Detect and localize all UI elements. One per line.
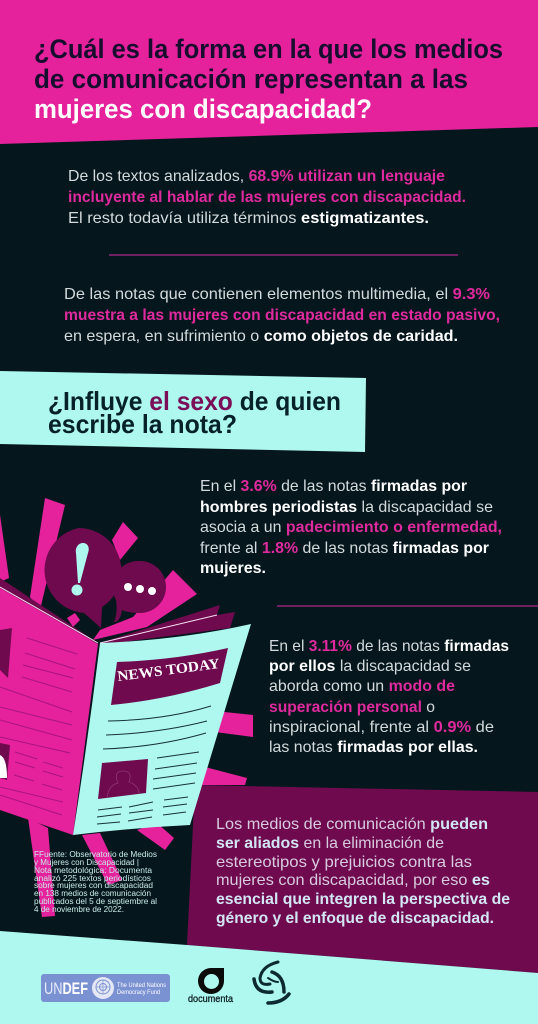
text block: superacion personal: las notas firmadas por ellas. [269,739,478,756]
rays behind the newspaper [0,498,253,917]
text block: padecimiento o enfermedad: hombres periodistas la discapacidad se [200,499,493,516]
text block: source note: FFuente: Observatorio de Medios [34,850,157,859]
title: ¿Cuál es la forma en la que los medios [34,34,503,64]
text block: lenguaje incluyente: De los textos analizados, 68.9% utilizan un lenguaje [68,168,445,185]
text block: conclusion: estereotipos y prejuicios contra las [216,854,472,871]
text block: conclusion: Los medios de comunicación pueden [216,816,488,833]
heading: ¿Influye el sexo de quien [48,386,341,416]
logo: UNDEF [41,974,170,1002]
panel: magenta header [0,0,538,144]
text block: superacion personal [269,638,509,756]
heading: escribe la nota? [48,409,237,439]
text block: elementos multimedia [64,286,500,345]
text block: source note: 4 de noviembre de 2022. [34,905,124,914]
panel: cyan banner with heading [0,371,366,452]
text block: superacion personal: inspiracional, frente al 0.9% de [269,719,494,736]
text block: superacion personal: aborda como un modo de [269,678,455,695]
masthead [111,648,228,705]
text block: lenguaje incluyente [68,168,466,227]
logo: swirl of hands [254,962,289,1003]
text block: source note [34,850,157,914]
logo: UNDEF: UNDEF [44,979,88,998]
logo: UNDEF: The United Nations [117,983,166,989]
icon: speech bubble with exclamation [45,528,121,628]
text block: conclusion: esencial que integren la perspectiva de [216,891,510,908]
heading [48,386,341,439]
text block: source note: sobre mujeres con discapacidad [34,881,153,890]
title [34,34,503,124]
panel: purple conclusion [187,785,538,973]
text block: lenguaje incluyente: El resto todavía utiliza términos estigmatizantes. [68,210,429,227]
text block: superacion personal: En el 3.11% de las notas firmadas [269,638,509,655]
text block: padecimiento o enfermedad [200,478,502,577]
logo: documenta: documenta [188,993,233,1005]
masthead: NEWS TODAY [116,656,221,685]
text block: padecimiento o enfermedad: asocia a un padecimiento o enfermedad, [200,519,502,536]
text block: lenguaje incluyente: incluyente al hablar de las mujeres con discapacidad. [68,189,466,206]
text block: padecimiento o enfermedad: mujeres. [200,560,266,577]
text block: padecimiento o enfermedad: frente al 1.8% de las notas firmadas por [200,540,489,557]
logo: documenta [188,968,233,1005]
text block: superacion personal: por ellos la discapacidad se [269,658,471,675]
text block: elementos multimedia: muestra a las mujeres con discapacidad en estado pasivo, [64,307,500,324]
text block: conclusion: mujeres con discapacidad, por eso es [216,872,490,889]
text block: source note: y Mujeres con Discapacidad | [34,858,139,867]
text block: conclusion: ser aliados en la eliminación de [216,835,444,852]
logo: UNDEF: Democracy Fund [117,990,160,996]
title: de comunicación representan a las [34,64,468,94]
icon: UN emblem [92,977,114,999]
text block: padecimiento o enfermedad: En el 3.6% de las notas firmadas por [200,478,467,495]
illustration: newspaper and speech bubbles [0,498,253,917]
text block: conclusion [216,816,510,927]
text block: source note: analizó 225 textos periodísticos [34,874,151,883]
text block: source note: publicados del 5 de septiembre al [34,897,157,906]
icon: speech bubble with dots [112,561,166,622]
text block: source note: Nota metodológica: Documenta [34,866,153,875]
right newspaper page [73,624,251,835]
text block: elementos multimedia: De las notas que contienen elementos multimedia, el 9.3% [64,286,490,303]
text block: source note: en 138 medios de comunicación [34,889,151,898]
panel: cyan footer [0,931,538,1024]
text block: superacion personal: superación personal o [269,699,435,716]
back pages [0,578,235,645]
photo placeholder [98,759,148,799]
left newspaper page [0,587,217,835]
title: mujeres con discapacidad? [34,94,372,124]
text block: elementos multimedia: en espera, en sufrimiento o como objetos de caridad. [64,328,458,345]
text block: conclusion: género y el enfoque de discapacidad. [216,910,494,927]
